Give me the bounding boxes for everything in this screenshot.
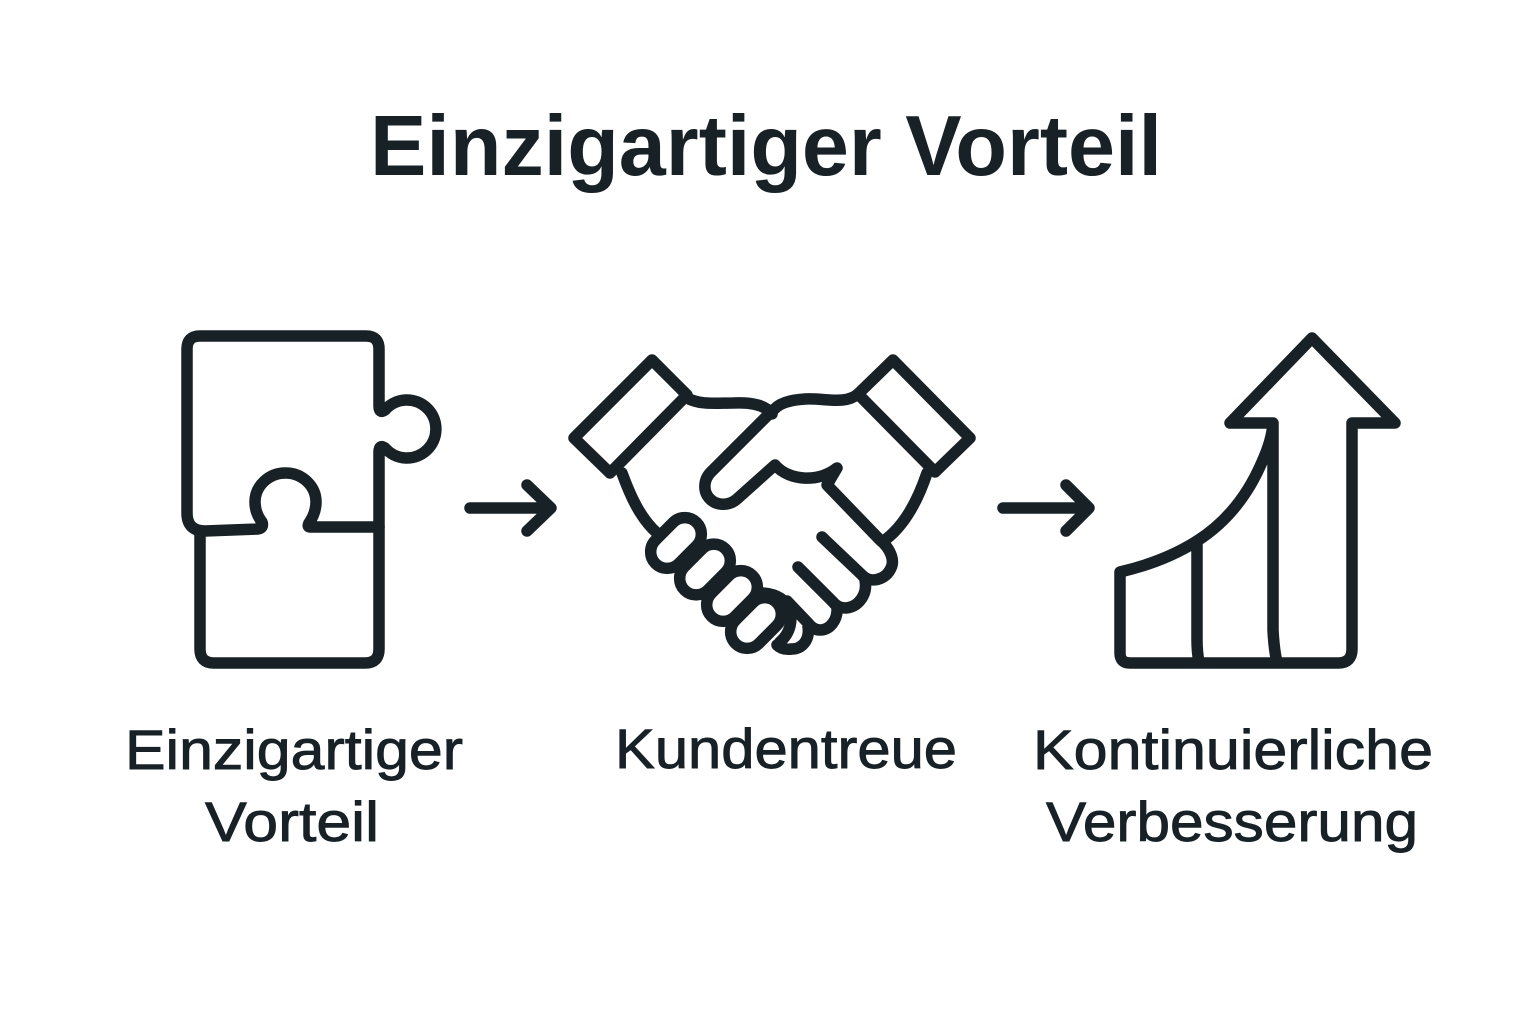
label: Kontinuierliche Verbesserung: Kontinuierliche <box>1033 718 1433 781</box>
third finger <box>787 601 837 630</box>
left hand knuckle 3 <box>700 564 764 628</box>
little finger <box>777 627 808 649</box>
arrow: handshake to growth <box>1003 485 1089 531</box>
label: Einzigartiger Vorteil: Vorteil <box>205 790 379 853</box>
thumb and upper right hand <box>705 415 892 580</box>
right wrist <box>885 473 927 540</box>
arrow: puzzle to handshake <box>470 485 551 531</box>
top of left hand <box>687 398 772 414</box>
label: Einzigartiger Vorteil <box>125 718 463 853</box>
label: Kundentreue: Kundentreue <box>615 717 957 780</box>
label: Kontinuierliche Verbesserung: Verbesserung <box>1046 790 1418 853</box>
title: Einzigartiger Vorteil <box>370 99 1162 194</box>
right cuff <box>858 360 970 472</box>
left cuff <box>574 360 687 473</box>
label: Kontinuierliche Verbesserung <box>1033 718 1433 853</box>
icon: growth arrow chart <box>1120 338 1395 663</box>
left hand knuckle 4 <box>724 591 788 655</box>
inner curve of left thumb <box>763 593 791 642</box>
icon: puzzle <box>187 336 436 663</box>
top of right hand <box>772 394 858 412</box>
icon: handshake <box>574 360 970 655</box>
left hand knuckle 2 <box>673 537 737 602</box>
second finger <box>798 567 866 608</box>
left wrist <box>622 473 657 533</box>
label: Einzigartiger Vorteil: Einzigartiger <box>125 718 463 781</box>
left hand knuckle 1 <box>644 511 708 575</box>
